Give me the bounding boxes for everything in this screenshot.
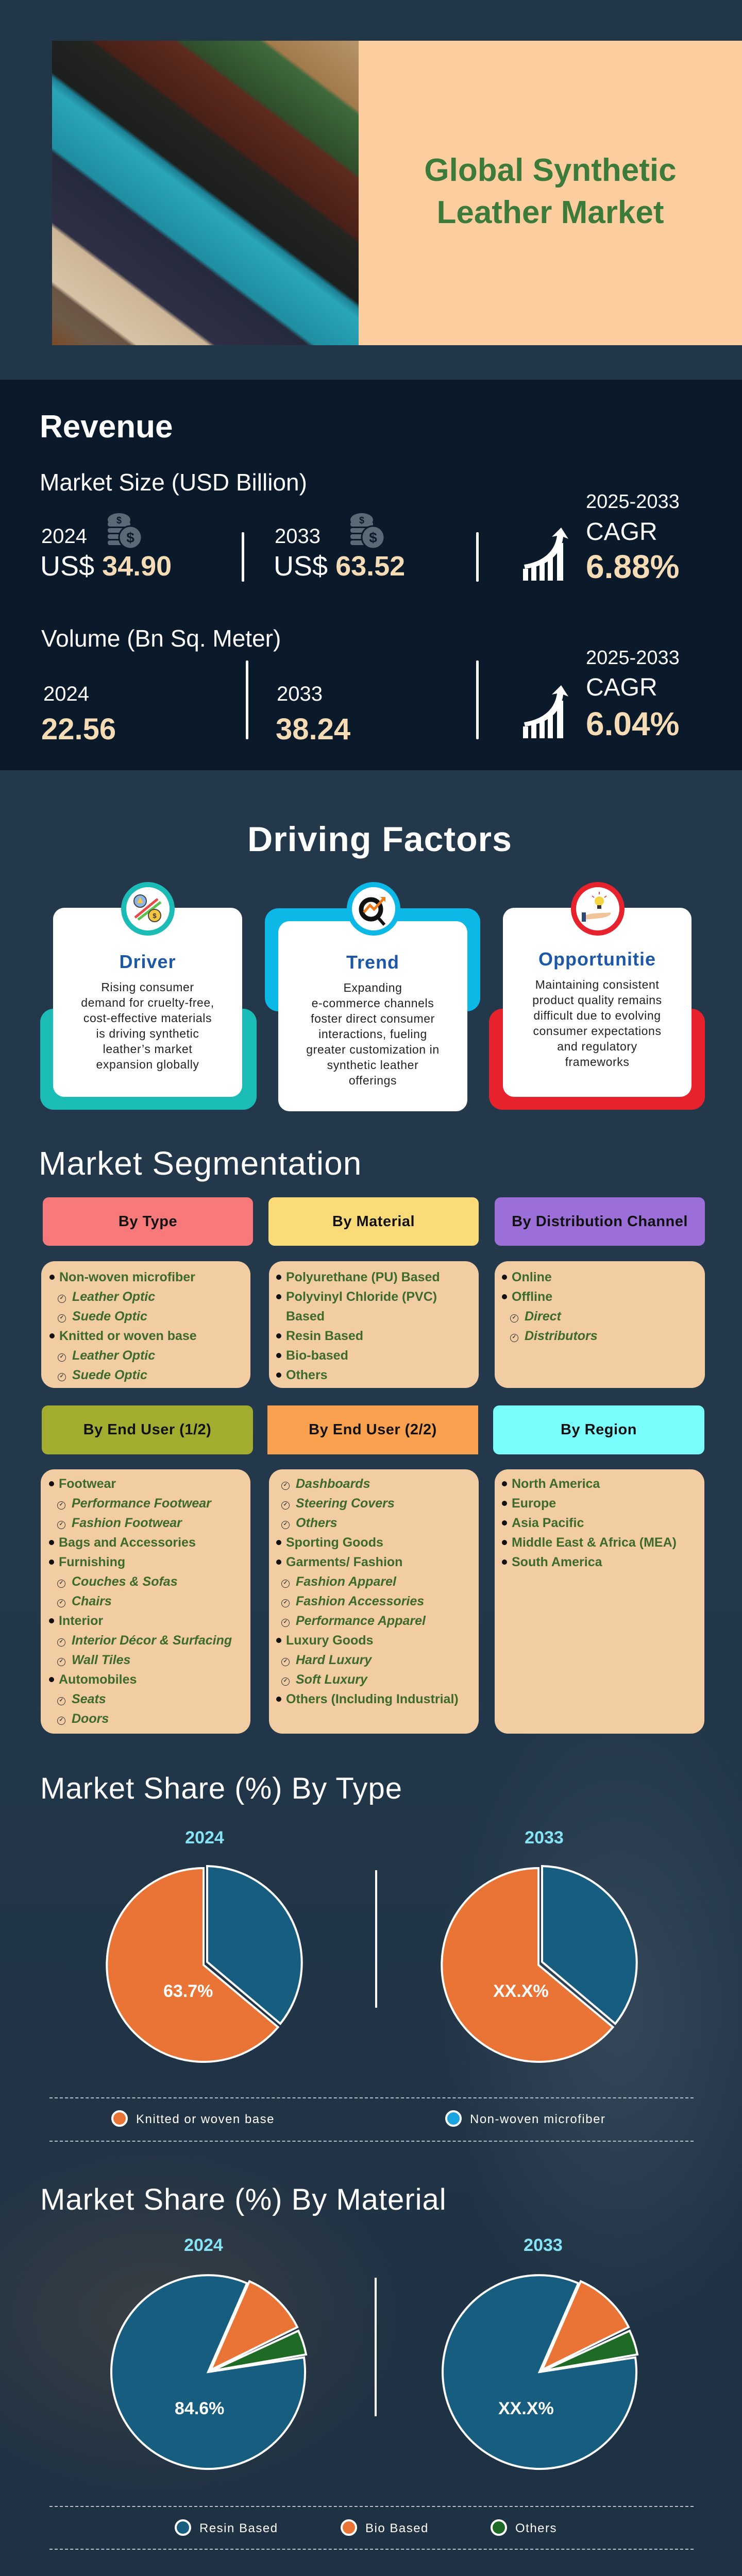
segment list: end user 2: Dashboards xyxy=(296,1477,370,1491)
heading: market segmentation: Market Segmentation xyxy=(39,1145,362,1182)
card: driver: Driver xyxy=(119,951,176,972)
label: 2024: 2024 xyxy=(185,1828,224,1848)
title: Global Synthetic xyxy=(424,152,677,188)
segment list: region: Middle East & Africa (MEA) xyxy=(512,1535,677,1550)
legend: type: Knitted or woven base xyxy=(136,2112,275,2126)
segment list: end user 2: Performance Apparel xyxy=(296,1614,426,1628)
pie chart: type 2024: 63.7% xyxy=(163,1981,213,2001)
label: 2033: 2033 xyxy=(525,1828,564,1848)
segment header: end user 2: By End User (2/2) xyxy=(309,1421,437,1438)
segment list: type: Suede Optic xyxy=(72,1368,147,1382)
segment list: material xyxy=(269,1261,479,1388)
card: driver: Rising consumer xyxy=(101,980,194,994)
segment list: end user 2: Sporting Goods xyxy=(286,1535,383,1550)
segment list: end user 1: Interior xyxy=(59,1614,103,1628)
icon: growth chart xyxy=(523,528,568,581)
heading: driving factors: Driving Factors xyxy=(247,820,512,859)
card: opportunity xyxy=(503,908,692,1097)
legend: type: Non-woven microfiber xyxy=(470,2112,605,2126)
stat: 2024 volume xyxy=(41,683,116,746)
icon: coins xyxy=(108,513,141,548)
card: driver: leather’s market xyxy=(103,1042,192,1056)
segment list: region: South America xyxy=(512,1555,602,1569)
subheading: market size: Market Size (USD Billion) xyxy=(40,469,307,496)
segment list: end user 1: Interior Décor & Surfacing xyxy=(72,1633,232,1648)
segment list: material: Polyurethane (PU) Based xyxy=(286,1270,440,1284)
header: title panel xyxy=(359,41,742,345)
segment list: type: Leather Optic xyxy=(72,1290,155,1304)
stat: volume CAGR: 6.04% xyxy=(586,705,679,742)
segment list: end user 1: Furnishing xyxy=(59,1555,125,1569)
segment list: end user 1: Couches & Sofas xyxy=(72,1574,178,1589)
segment list: end user 1: Performance Footwear xyxy=(72,1496,211,1511)
segment header: by material xyxy=(268,1197,479,1246)
card: trend: offerings xyxy=(349,1074,397,1087)
segment list: end user 2: Soft Luxury xyxy=(296,1672,367,1687)
segment list: end user 2: Hard Luxury xyxy=(296,1653,372,1667)
legend: material: Resin Based xyxy=(199,2521,278,2535)
label: 2033: 2033 xyxy=(524,2235,563,2255)
card: trend xyxy=(278,921,467,1111)
segment header: end user 2 xyxy=(267,1405,478,1454)
segment list: end user 1: Fashion Footwear xyxy=(72,1516,182,1530)
segment list: type: Knitted or woven base xyxy=(59,1329,197,1343)
card: driver xyxy=(53,908,242,1097)
segment list: end user 1: Seats xyxy=(72,1692,106,1706)
segment header: end user 1 xyxy=(42,1405,253,1454)
segment list: end user 2: Others xyxy=(296,1516,338,1530)
pie chart: material 2024: 84.6% xyxy=(175,2399,224,2418)
icon: driver xyxy=(121,882,175,936)
heading: market share by type: Market Share (%) By Type xyxy=(40,1772,402,1805)
card: driver: expansion globally xyxy=(96,1058,199,1071)
segment list: end user 2 xyxy=(269,1469,479,1734)
stat: 2024 volume: 22.56 xyxy=(41,713,116,746)
card: trend: synthetic leather xyxy=(327,1058,418,1072)
segment list: end user 1: Bags and Accessories xyxy=(59,1535,196,1550)
segment list: end user 1 xyxy=(41,1469,250,1734)
segment header: by region xyxy=(493,1405,704,1454)
stat: market size CAGR: CAGR xyxy=(586,518,657,546)
segment header: by distribution channel: By Distribution Channel xyxy=(512,1213,688,1229)
segment header: by type xyxy=(43,1197,253,1246)
stat: volume CAGR xyxy=(586,647,680,742)
card: opportunity: Maintaining consistent xyxy=(535,978,659,991)
stat: 2024 volume: 2024 xyxy=(43,683,89,705)
legend: type xyxy=(111,2110,605,2127)
segment list: material: Resin Based xyxy=(286,1329,363,1343)
segment list: end user 1: Footwear xyxy=(59,1477,116,1491)
card: opportunity: Opportunitie xyxy=(538,948,656,970)
card: trend: e-commerce channels xyxy=(312,996,434,1010)
pie chart: type 2024 xyxy=(106,1865,303,2063)
icon: coins: $ xyxy=(359,515,364,526)
panel: revenue xyxy=(0,380,742,770)
segment list: end user 2: Others (Including Industrial) xyxy=(286,1692,459,1706)
icon: driver: $ xyxy=(153,912,157,920)
stat: volume CAGR: CAGR xyxy=(586,674,657,701)
card: opportunity: difficult due to evolving xyxy=(533,1009,661,1022)
segment list: distribution: Distributors xyxy=(525,1329,598,1343)
segment header: by region: By Region xyxy=(561,1421,637,1438)
stat: 2033 volume xyxy=(276,683,350,746)
stat: 2024 market size xyxy=(40,513,172,582)
panel: trend xyxy=(265,882,480,1111)
segment list: end user 1: Wall Tiles xyxy=(72,1653,130,1667)
legend: material: Others xyxy=(515,2521,557,2535)
stat: 2033 volume: 2033 xyxy=(277,683,323,705)
segment list: region: Asia Pacific xyxy=(512,1516,584,1530)
segment list: end user 2: Fashion Apparel xyxy=(296,1574,396,1589)
segment list: distribution: Direct xyxy=(525,1309,561,1324)
segment list: distribution: Offline xyxy=(512,1290,552,1304)
icon: trend xyxy=(347,882,400,936)
title: Leather Market xyxy=(436,195,664,230)
panel: opportunity xyxy=(489,882,705,1110)
stat: 2024 market size: US$ 34.90 xyxy=(40,551,172,582)
segment header: end user 1: By End User (1/2) xyxy=(83,1421,211,1438)
segment list: region xyxy=(495,1469,704,1734)
heading: revenue: Revenue xyxy=(40,409,173,445)
icon: growth chart xyxy=(523,685,568,738)
segment list: type: Leather Optic xyxy=(72,1348,155,1363)
icon: coins: $ xyxy=(116,515,122,526)
stat: 2033 market size: US$ 63.52 xyxy=(274,551,405,582)
stat: volume CAGR: 2025-2033 xyxy=(586,647,680,669)
title xyxy=(424,152,677,230)
segment list: end user 2: Fashion Accessories xyxy=(296,1594,424,1608)
stat: 2024 market size: 2024 xyxy=(41,525,87,548)
pie chart: type 2033 xyxy=(441,1865,638,2063)
segment header: by type: By Type xyxy=(119,1213,177,1229)
segment list: region: Europe xyxy=(512,1496,556,1511)
pie chart: material 2033: XX.X% xyxy=(498,2399,554,2418)
segment list: material: Based xyxy=(286,1309,325,1324)
segment list: end user 2: Luxury Goods xyxy=(286,1633,373,1648)
subheading: volume: Volume (Bn Sq. Meter) xyxy=(41,625,281,652)
icon: coins: $ xyxy=(369,530,377,546)
card: driver: is driving synthetic xyxy=(96,1027,199,1040)
stat: 2033 market size: 2033 xyxy=(275,525,321,548)
icon: opportunity xyxy=(571,882,625,936)
segment header: by material: By Material xyxy=(332,1213,415,1229)
stat: 2033 market size xyxy=(274,513,405,582)
segment list: end user 1: Doors xyxy=(72,1711,109,1726)
header: leather image xyxy=(52,41,359,345)
pie chart: material 2033 xyxy=(442,2274,639,2470)
icon: coins xyxy=(350,513,383,548)
card: opportunity: and regulatory xyxy=(557,1040,637,1053)
card: trend: greater customization in xyxy=(306,1043,440,1056)
segment list: material: Bio-based xyxy=(286,1348,348,1363)
panel: driver xyxy=(40,882,257,1110)
label: 2024: 2024 xyxy=(184,2235,223,2255)
card: driver: demand for cruelty-free, xyxy=(81,996,214,1009)
stat: market size CAGR xyxy=(586,491,680,585)
pie chart: material 2024 xyxy=(110,2274,307,2470)
card: trend: Expanding xyxy=(343,981,402,994)
segment list: end user 1: Automobiles xyxy=(59,1672,137,1687)
card: opportunity: consumer expectations xyxy=(533,1024,662,1038)
segment list: type xyxy=(41,1261,250,1388)
segment list: distribution xyxy=(495,1261,705,1388)
stat: market size CAGR: 2025-2033 xyxy=(586,491,680,513)
pie chart: type 2033: XX.X% xyxy=(493,1981,549,2001)
stat: market size CAGR: 6.88% xyxy=(586,548,679,585)
segment list: material: Others xyxy=(286,1368,328,1382)
segment list: end user 1: Chairs xyxy=(72,1594,112,1608)
segment list: end user 2: Steering Covers xyxy=(296,1496,395,1511)
card: trend: interactions, fueling xyxy=(318,1027,427,1041)
card: driver: cost-effective materials xyxy=(83,1011,212,1025)
segment list: material: Polyvinyl Chloride (PVC) xyxy=(286,1290,437,1304)
legend: material xyxy=(175,2519,557,2536)
segment list: end user 2: Garments/ Fashion xyxy=(286,1555,402,1569)
card: trend: foster direct consumer xyxy=(311,1012,435,1025)
segment list: region: North America xyxy=(512,1477,600,1491)
segment list: type: Suede Optic xyxy=(72,1309,147,1324)
legend: material: Bio Based xyxy=(365,2521,429,2535)
card: opportunity: product quality remains xyxy=(532,993,662,1007)
icon: coins: $ xyxy=(126,530,134,546)
card: trend: Trend xyxy=(346,952,399,973)
card: opportunity: frameworks xyxy=(565,1055,629,1069)
segment header: by distribution channel xyxy=(495,1197,705,1246)
heading: market share by material: Market Share (%) By Material xyxy=(40,2183,447,2216)
segment list: type: Non-woven microfiber xyxy=(59,1270,195,1284)
stat: 2033 volume: 38.24 xyxy=(276,713,350,746)
segment list: distribution: Online xyxy=(512,1270,552,1284)
